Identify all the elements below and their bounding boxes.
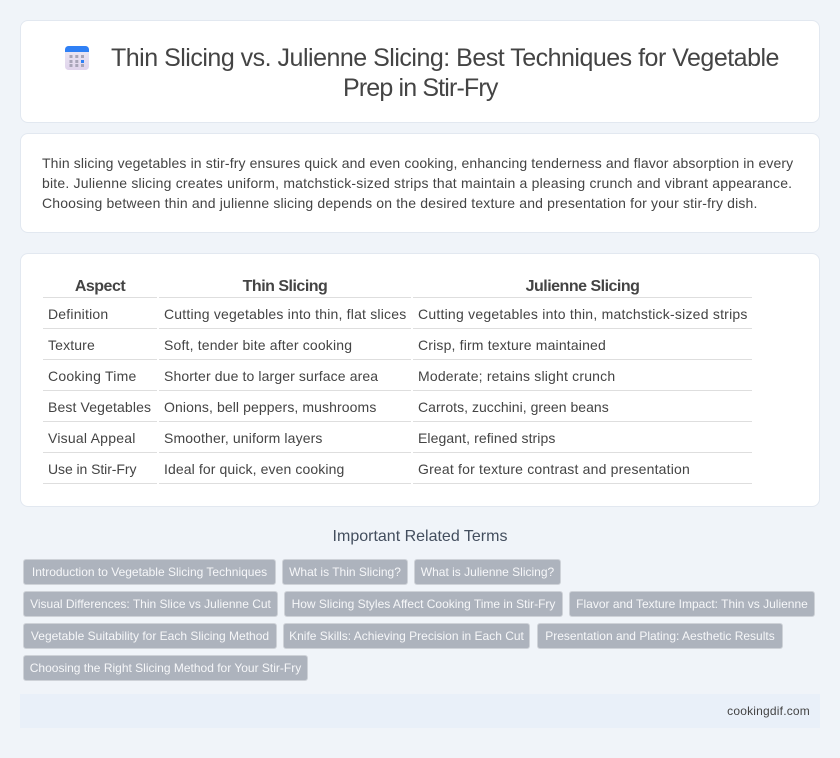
row: cooking time: Shorter due to larger surface area: [164, 368, 378, 384]
related term tags: What is Julienne Slicing?: [421, 565, 554, 579]
row: use in stir-fry: [48, 461, 690, 477]
row: use in stir-fry: Ideal for quick, even cooking: [164, 461, 344, 477]
row: cooking time: Moderate; retains slight crunch: [418, 368, 615, 384]
related term tags: [23, 559, 815, 681]
title: [111, 44, 779, 102]
table header: Thin Slicing: [243, 278, 327, 295]
row: best vegetables: Best Vegetables: [48, 399, 151, 415]
panel: comparison table card: [20, 253, 820, 507]
row: definition: [48, 306, 748, 322]
row: definition: Definition: [48, 306, 108, 322]
row: texture: Crisp, firm texture maintained: [418, 337, 606, 353]
table header: Aspect: [75, 278, 125, 295]
intro paragraph: Choosing between thin and julienne slicing depends on the desired texture and presentation for your stir-fry dish.: [42, 195, 758, 211]
footer bar: [20, 694, 820, 728]
row: texture: [48, 337, 606, 353]
related term tags: Introduction to Vegetable Slicing Techniques: [32, 565, 267, 579]
row: definition: Cutting vegetables into thin, matchstick-sized strips: [418, 306, 748, 322]
icon: calendar: [65, 46, 89, 70]
related term tags: Presentation and Plating: Aesthetic Results: [545, 629, 775, 643]
related term tags: Vegetable Suitability for Each Slicing Method: [31, 629, 269, 643]
text: Prep in Stir-Fry: [343, 74, 497, 102]
row: cooking time: [48, 368, 615, 384]
related term tags: Knife Skills: Achieving Precision in Each Cut: [289, 629, 524, 643]
intro paragraph: Thin slicing vegetables in stir-fry ensures quick and even cooking, enhancing tenderness and flavor absorption in every: [42, 155, 793, 171]
intro paragraph: [42, 155, 794, 211]
row: visual appeal: [48, 430, 555, 446]
related term tags: Visual Differences: Thin Slice vs Julienne Cut: [30, 597, 271, 611]
footer credit: cookingdif.com: [727, 704, 810, 718]
text: Thin Slicing vs. Julienne Slicing: Best Techniques for Vegetable: [111, 44, 779, 72]
related term tags: Choosing the Right Slicing Method for Your Stir-Fry: [30, 661, 301, 675]
row: visual appeal: Smoother, uniform layers: [164, 430, 322, 446]
panel: intro text card: [20, 133, 820, 233]
row: texture: Texture: [48, 337, 95, 353]
row: best vegetables: Carrots, zucchini, green beans: [418, 399, 609, 415]
related term tags: Flavor and Texture Impact: Thin vs Julienne: [576, 597, 808, 611]
row: visual appeal: Elegant, refined strips: [418, 430, 555, 446]
row: best vegetables: [48, 399, 609, 415]
table header: [75, 278, 639, 295]
related term tags: How Slicing Styles Affect Cooking Time in Stir-Fry: [292, 597, 555, 611]
row: cooking time: Cooking Time: [48, 368, 137, 384]
row: use in stir-fry: Use in Stir-Fry: [48, 461, 136, 477]
row: best vegetables: Onions, bell peppers, mushrooms: [164, 399, 376, 415]
related terms heading: Important Related Terms: [333, 528, 507, 545]
row: visual appeal: Visual Appeal: [48, 430, 136, 446]
row: use in stir-fry: Great for texture contrast and presentation: [418, 461, 690, 477]
panel: title card: [20, 20, 820, 123]
intro paragraph: bite. Julienne slicing creates uniform, matchstick-sized strips that maintain a pleasing crunch and vibrant appearance.: [42, 175, 792, 191]
row: definition: Cutting vegetables into thin, flat slices: [164, 306, 406, 322]
related term tags: What is Thin Slicing?: [289, 565, 401, 579]
row: texture: Soft, tender bite after cooking: [164, 337, 352, 353]
table header: Julienne Slicing: [526, 278, 639, 295]
